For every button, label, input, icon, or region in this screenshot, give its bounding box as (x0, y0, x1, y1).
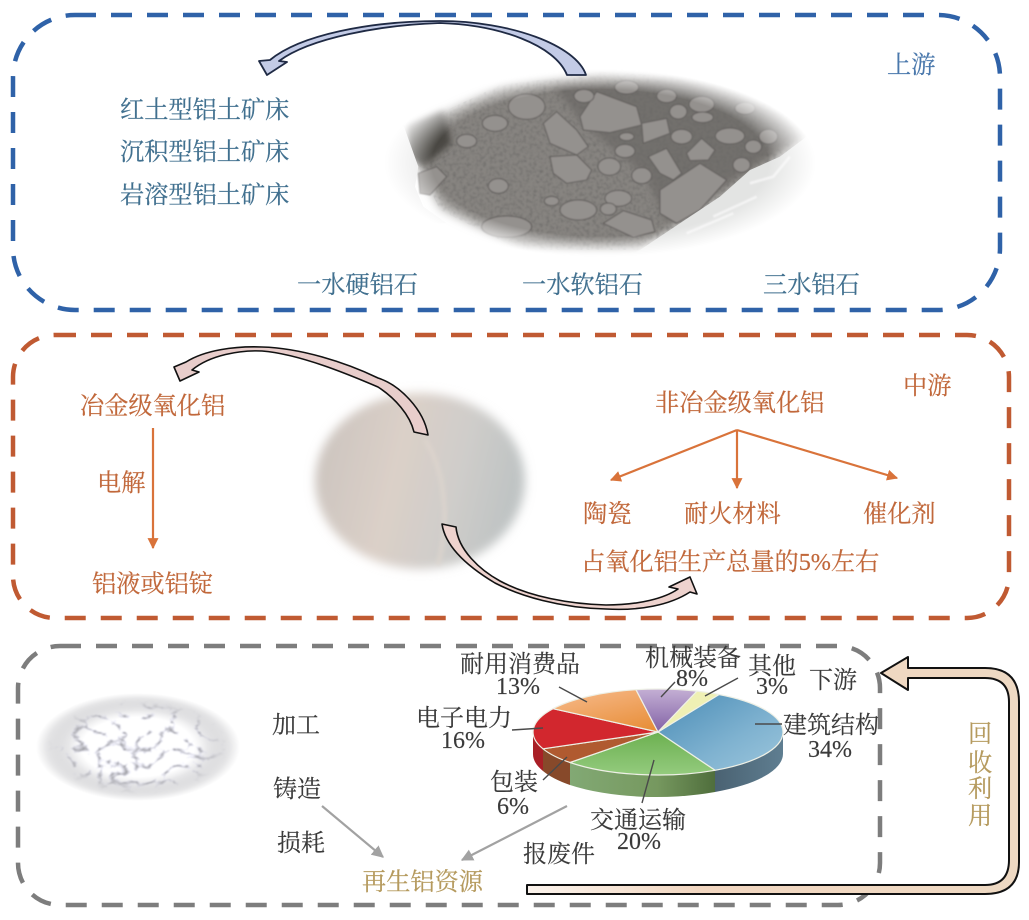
arrow: alumina to non-metallurgical (442, 524, 697, 609)
panel: midstream (13, 335, 1009, 618)
arrow: recycling (527, 657, 1019, 894)
text: recycled aluminium resources: 再生铝资源 (362, 869, 484, 896)
text: processing: 铸造 (273, 776, 321, 803)
text: applications (583, 501, 936, 528)
text: deposit types (120, 97, 289, 209)
text: minerals: 一水软铝石 (522, 272, 643, 299)
photo: aluminium scrap (40, 695, 236, 799)
text: deposit types: 岩溶型铝土矿床 (120, 182, 289, 209)
pie labels: 包装 (490, 769, 538, 796)
text: processing: 损耗 (277, 830, 325, 857)
arrow: alumina to metallurgical (174, 347, 428, 435)
arrow: ore to deposits (259, 21, 586, 75)
text: share of production: 占氧化铝生产总量的5%左右 (581, 549, 879, 576)
photo: bauxite ore (402, 72, 804, 252)
panel: downstream (18, 645, 880, 905)
text: non-metallurgical alumina: 非冶金级氧化铝 (655, 390, 824, 417)
arrows: non-metallurgical branches (611, 430, 897, 488)
pie labels: 交通运输 (590, 807, 686, 834)
text: minerals: 三水铝石 (763, 272, 860, 299)
pie labels: 16% (441, 728, 485, 754)
text: applications: 耐火材料 (684, 501, 781, 528)
pie labels: 13% (496, 674, 540, 700)
text: metallurgical alumina: 冶金级氧化铝 (80, 393, 225, 420)
pie labels: 8% (676, 666, 708, 692)
text: processing (272, 712, 325, 857)
text: deposit types: 红土型铝土矿床 (120, 97, 289, 124)
text: processing: 加工 (272, 712, 320, 739)
label: upstream: 上游 (887, 52, 935, 79)
text: recycling (968, 721, 992, 830)
pie labels: 6% (497, 794, 529, 820)
arrows: scrap flows (322, 806, 567, 860)
pie labels: 3% (756, 674, 788, 700)
pie labels: 机械装备 (645, 645, 741, 672)
pie labels: 建筑结构 (783, 712, 879, 739)
text: recycling: 收 (968, 750, 992, 777)
text: recycling: 用 (968, 803, 992, 830)
text: applications: 陶瓷 (583, 501, 631, 528)
pie labels: 34% (808, 737, 852, 763)
text: recycling: 回 (968, 721, 992, 748)
pie labels: 耐用消费品 (460, 651, 580, 678)
pie leader lines (512, 678, 782, 803)
arrow: electrolysis (152, 428, 154, 548)
text: recycling: 利 (968, 776, 992, 803)
text: applications: 催化剂 (863, 501, 936, 528)
text: minerals (297, 272, 860, 299)
text: scrap parts: 报废件 (523, 841, 595, 868)
pie labels: 电子电力 (416, 705, 512, 732)
text: aluminium liquid or ingot: 铝液或铝锭 (92, 571, 213, 598)
panel: upstream (13, 15, 1000, 310)
pie labels (416, 645, 879, 855)
pie labels: 其他 (748, 653, 796, 680)
pie labels: 20% (617, 829, 661, 855)
text: deposit types: 沉积型铝土矿床 (120, 139, 289, 166)
pie chart: end uses (512, 678, 783, 803)
text: electrolysis: 电解 (97, 470, 145, 497)
text: minerals: 一水硬铝石 (297, 272, 418, 299)
label: midstream: 中游 (903, 373, 951, 400)
photo: alumina powder (315, 393, 525, 569)
label: downstream: 下游 (809, 667, 857, 694)
